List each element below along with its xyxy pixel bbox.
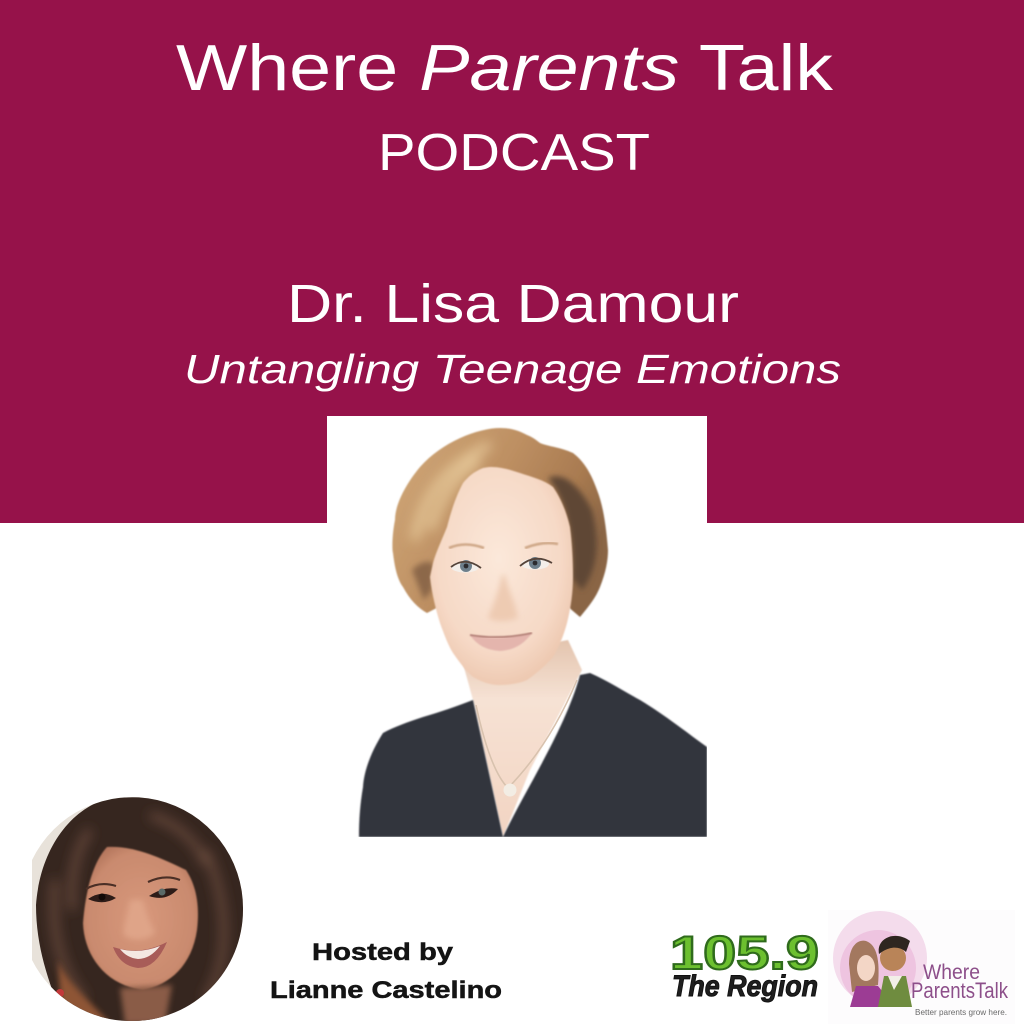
guest name: Dr. Lisa Damour bbox=[287, 274, 739, 334]
logo figures bbox=[849, 936, 912, 1007]
host hair copper ends bbox=[58, 960, 110, 1024]
mouth bbox=[470, 633, 532, 651]
subtitle: podcast: PODCAST bbox=[378, 124, 650, 182]
eyes bbox=[451, 557, 552, 572]
hosted by label: Hosted by bbox=[312, 939, 454, 966]
nose shading bbox=[488, 575, 518, 621]
hair shadow side bbox=[548, 476, 597, 590]
sweater bbox=[359, 673, 707, 837]
header banner bbox=[0, 0, 1024, 523]
logo: 105.9 The Region: The Region bbox=[672, 970, 818, 1003]
face bbox=[430, 467, 573, 685]
host nose bbox=[124, 900, 155, 939]
hair shadow left tuft bbox=[412, 562, 434, 600]
host eyes bbox=[86, 877, 180, 902]
hosted by label: Lianne Castelino bbox=[270, 977, 502, 1004]
necklace bbox=[476, 680, 577, 788]
hair highlight streaks bbox=[415, 445, 490, 540]
logo: Where Parents Talk: Where bbox=[923, 961, 980, 984]
logo: 105.9 The Region: 105.9 bbox=[670, 926, 819, 979]
host face bbox=[83, 847, 198, 990]
logo: Where Parents Talk: ParentsTalk bbox=[911, 978, 1009, 1003]
host red accent bbox=[56, 989, 64, 997]
title: Where Parents Talk bbox=[176, 31, 834, 104]
host neck bbox=[120, 985, 172, 1024]
eyebrows bbox=[449, 543, 558, 548]
hair back bbox=[392, 428, 608, 617]
hosted by label bbox=[270, 939, 502, 1004]
host smile bbox=[113, 942, 167, 968]
logo: Where Parents Talk: Better parents grow here. bbox=[915, 1007, 1007, 1017]
host hair streaks bbox=[54, 815, 224, 1000]
episode title: Untangling Teenage Emotions bbox=[184, 346, 841, 392]
host portrait bbox=[23, 795, 248, 1024]
neck and chest bbox=[462, 640, 582, 837]
logo: Where Parents Talk bbox=[828, 910, 1015, 1024]
nose highlight bbox=[494, 560, 502, 600]
guest portrait bbox=[358, 427, 707, 837]
logo: 105.9 The Region bbox=[670, 926, 819, 1003]
host hair bbox=[36, 797, 244, 1024]
